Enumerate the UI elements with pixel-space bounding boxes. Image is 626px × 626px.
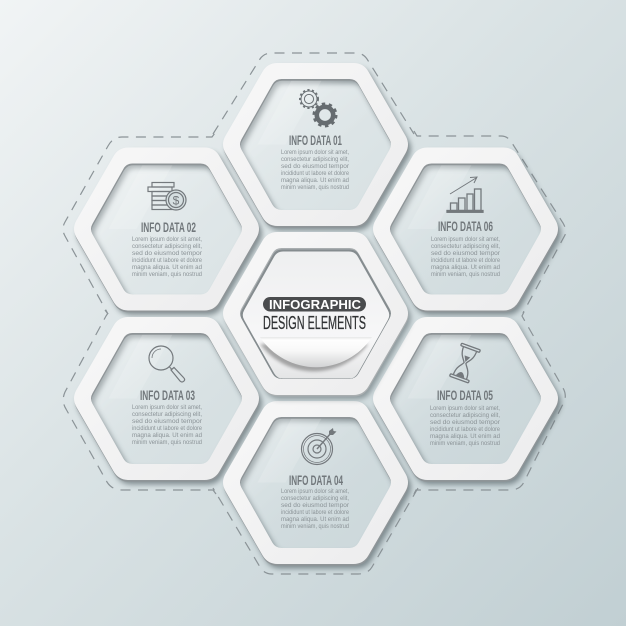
text block 02: sed do eiusmod tempor [132,250,203,257]
text block 01 [281,149,350,191]
icon: growth chart [447,177,483,212]
text block 03: incididunt ut labore et dolore [132,425,202,432]
heading 01: INFO DATA 01 [289,133,342,148]
panel 04 [223,401,411,568]
text block 03: Lorem ipsum dolor sit amet, [132,404,202,411]
text block 01: consectetur adipiscing elit, [281,156,349,163]
text block 04: magna aliqua. Ut enim ad [281,516,349,523]
text block 06: consectetur adipiscing elit, [431,243,500,250]
text block 06: magna aliqua. Ut enim ad [431,264,500,271]
text block 03 [132,404,203,446]
panel 02 [74,148,262,315]
icon: magnifier [149,346,185,382]
badge: infographic: INFOGRAPHIC [269,297,362,312]
heading 03: INFO DATA 03 [140,388,195,403]
text block 03: sed do eiusmod tempor [132,418,203,425]
text block 05: incididunt ut labore et dolore [430,426,500,433]
heading 02: INFO DATA 02 [141,220,196,235]
icon: target [302,428,336,464]
text block 05: Lorem ipsum dolor sit amet, [430,405,500,412]
text block 06: minim veniam, quis nostrud [431,271,500,278]
text block 06 [431,236,501,278]
panel 05 [373,317,561,484]
subtitle: design elements: DESIGN ELEMENTS [263,312,366,333]
heading 06: INFO DATA 06 [438,219,493,234]
text block 02: magna aliqua. Ut enim ad [132,264,202,271]
text block 03: consectetur adipiscing elit, [132,411,202,418]
text block 04: incididunt ut labore et dolore [281,509,349,516]
text block 06: incididunt ut labore et dolore [431,257,500,264]
text block 05: consectetur adipiscing elit, [430,412,500,419]
text block 04: Lorem ipsum dolor sit amet, [281,488,349,495]
icon: gears [300,90,336,126]
text block 04: sed do eiusmod tempor [281,502,350,509]
text block 05: magna aliqua. Ut enim ad [430,433,500,440]
text block 01: magna aliqua. Ut enim ad [281,177,349,184]
text block 04: minim veniam, quis nostrud [281,523,349,530]
text block 01: sed do eiusmod tempor [281,163,350,170]
text block 05: minim veniam, quis nostrud [430,440,500,447]
dashed outline [63,53,566,574]
text block 01: minim veniam, quis nostrud [281,184,349,191]
text block 05: sed do eiusmod tempor [430,419,501,426]
heading 05: INFO DATA 05 [437,388,493,403]
text block 01: Lorem ipsum dolor sit amet, [281,149,349,156]
panel 06 [373,148,561,315]
heading 04: INFO DATA 04 [289,473,343,488]
text block 01: incididunt ut labore et dolore [281,170,349,177]
text block 02: incididunt ut labore et dolore [132,257,202,264]
text block 02: consectetur adipiscing elit, [132,243,202,250]
flap [260,337,372,371]
panel 03 [74,317,262,484]
text block 05 [430,405,501,447]
panel: center [223,232,411,400]
text block 02 [132,236,203,278]
text block 03: minim veniam, quis nostrud [132,439,202,446]
text block 06: sed do eiusmod tempor [431,250,501,257]
icon: coins [148,182,186,210]
panel 01 [223,63,411,230]
text block 02: Lorem ipsum dolor sit amet, [132,236,202,243]
text block 04: consectetur adipiscing elit, [281,495,349,502]
text block 02: minim veniam, quis nostrud [132,271,202,278]
icon: hourglass [450,343,480,383]
text block 03: magna aliqua. Ut enim ad [132,432,202,439]
icon: coins: $ [173,194,180,208]
text block 04 [281,488,350,530]
text block 06: Lorem ipsum dolor sit amet, [431,236,500,243]
